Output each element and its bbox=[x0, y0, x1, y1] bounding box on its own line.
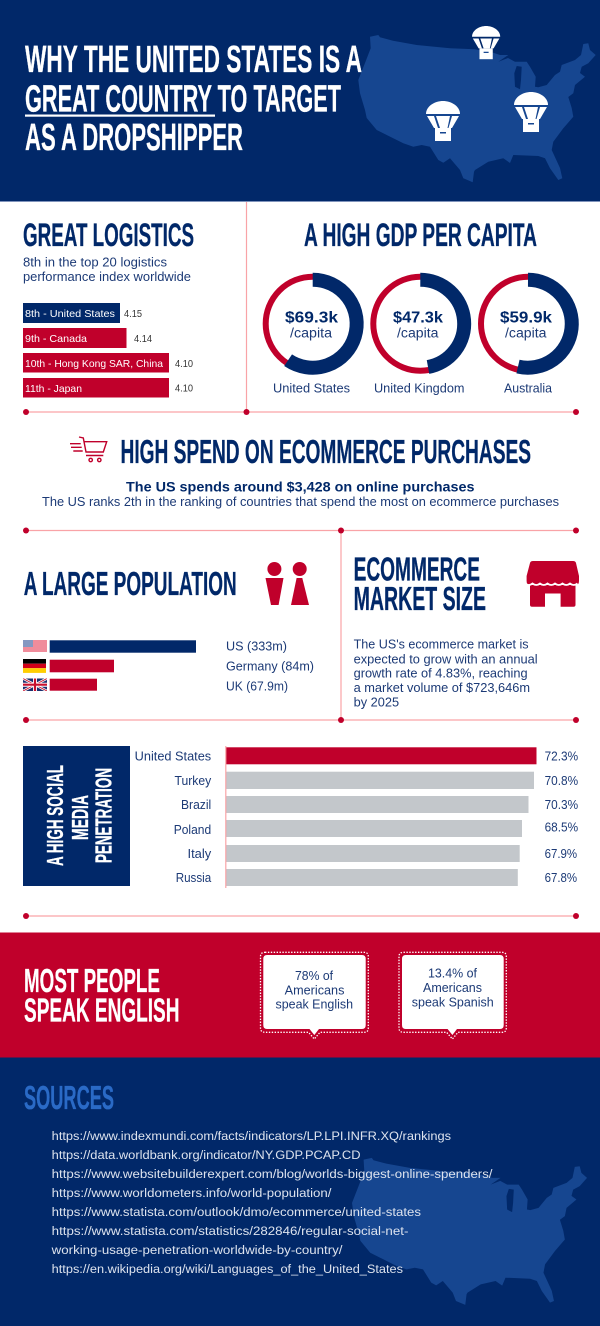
text: source links: https://www.statista.com/outlook/dmo/ecommerce/united-states bbox=[52, 1205, 421, 1219]
country labels: Italy bbox=[188, 847, 212, 861]
callout: 78% speak English: 78% of bbox=[295, 969, 334, 983]
bar chart: logistics index bbox=[23, 303, 193, 398]
icon: store bbox=[525, 561, 579, 607]
percentage labels: 70.3% bbox=[545, 798, 578, 812]
bar chart: logistics index: 4.10 bbox=[175, 382, 193, 394]
icon: people bbox=[266, 562, 309, 605]
header panel bbox=[0, 0, 600, 202]
heading box: social media: A HIGH SOCIAL bbox=[42, 765, 68, 866]
callout: 13.4% speak Spanish: 13.4% of bbox=[428, 967, 478, 981]
donut: United States: /capita bbox=[290, 326, 333, 340]
percentage labels: 68.5% bbox=[545, 821, 578, 835]
text: spend summary: The US spends around $3,428 on online purchases bbox=[126, 478, 475, 494]
bar chart: logistics index: 8th - United States bbox=[25, 308, 115, 320]
heading: english: MOST PEOPLE bbox=[24, 962, 160, 999]
text: market size description: expected to grow with an annual bbox=[354, 652, 538, 666]
callout: 78% speak English: speak English bbox=[276, 997, 353, 1011]
text: logistics description: 8th in the top 20 logistics bbox=[23, 256, 167, 270]
bar chart: logistics index: 4.14 bbox=[134, 333, 152, 345]
text: source links bbox=[51, 1129, 493, 1276]
bar chart: social penetration bbox=[226, 746, 537, 888]
callout: 13.4% speak Spanish: Americans bbox=[423, 981, 482, 995]
heading box: social media: MEDIA bbox=[67, 795, 93, 840]
bar chart: population bbox=[50, 640, 196, 691]
flag: United Kingdom bbox=[23, 678, 47, 691]
panel: a large population bbox=[23, 562, 314, 694]
text: spend summary bbox=[42, 478, 559, 509]
donut: Australia: Australia bbox=[504, 380, 553, 396]
map: United States watermark bbox=[352, 1158, 587, 1305]
country labels: Brazil bbox=[181, 798, 211, 812]
donut: Australia bbox=[481, 277, 575, 396]
percentage labels: 70.8% bbox=[545, 774, 578, 788]
map: United States bbox=[358, 35, 596, 182]
title: AS A DROPSHIPPER bbox=[25, 117, 243, 159]
heading: english bbox=[24, 962, 180, 1029]
panel: ecommerce market size bbox=[354, 551, 579, 709]
percentage labels bbox=[545, 750, 578, 885]
flag: Germany bbox=[23, 659, 46, 673]
bar chart: logistics index: 10th - Hong Kong SAR, China bbox=[25, 358, 163, 370]
heading: market size: MARKET SIZE bbox=[354, 580, 486, 617]
icon: shopping cart bbox=[70, 437, 107, 462]
population labels: Germany (84m) bbox=[226, 660, 314, 674]
country labels: Russia bbox=[176, 871, 211, 885]
donut: United Kingdom bbox=[373, 277, 467, 396]
text: source links: https://en.wikipedia.org/wiki/Languages_of_the_United_States bbox=[52, 1262, 403, 1276]
panel: great logistics bbox=[23, 217, 194, 398]
percentage labels: 67.9% bbox=[545, 847, 577, 861]
text: source links: working-usage-penetration-worldwide-by-country/ bbox=[51, 1243, 343, 1257]
donut: Australia: $59.9k bbox=[500, 310, 552, 327]
panel: high spend on ecommerce bbox=[42, 433, 559, 509]
donut: United States: United States bbox=[273, 380, 350, 396]
text: logistics description: performance index worldwide bbox=[23, 270, 191, 284]
text: market size description: by 2025 bbox=[354, 695, 399, 709]
text: source links: https://data.worldbank.org/indicator/NY.GDP.PCAP.CD bbox=[52, 1148, 361, 1162]
title: WHY THE UNITED STATES IS A bbox=[25, 39, 362, 81]
heading: sources: SOURCES bbox=[24, 1079, 114, 1116]
text: spend summary: The US ranks 2th in the ranking of countries that spend the most on ecommerce purchases bbox=[42, 495, 559, 509]
flag: United States bbox=[23, 640, 47, 653]
heading: great logistics: GREAT LOGISTICS bbox=[23, 217, 194, 253]
callout: 78% speak English bbox=[260, 952, 368, 1039]
country labels: Poland bbox=[174, 823, 211, 837]
percentage labels: 67.8% bbox=[545, 871, 577, 885]
callout: 13.4% speak Spanish: speak Spanish bbox=[412, 996, 494, 1010]
donut: United States bbox=[266, 277, 360, 396]
population labels bbox=[226, 640, 314, 694]
heading: market size bbox=[354, 551, 486, 617]
text: source links: https://www.indexmundi.com/facts/indicators/LP.LPI.INFR.XQ/rankings bbox=[52, 1129, 451, 1143]
heading box: social media bbox=[23, 746, 130, 886]
text: source links: https://www.websitebuilderexpert.com/blog/worlds-biggest-online-spenders/ bbox=[52, 1167, 493, 1181]
donut: United Kingdom: United Kingdom bbox=[374, 380, 464, 396]
title bbox=[25, 39, 362, 159]
text: market size description: The US's ecommerce market is bbox=[354, 638, 529, 652]
bar chart: logistics index: 11th - Japan bbox=[25, 383, 82, 395]
country labels: United States bbox=[135, 750, 211, 764]
heading box: social media: PENETRATION bbox=[91, 768, 117, 863]
title: GREAT COUNTRY TO TARGET bbox=[25, 78, 341, 120]
percentage labels: 72.3% bbox=[545, 750, 578, 764]
panel: high social media penetration bbox=[23, 746, 578, 888]
donut: United States: $69.3k bbox=[285, 310, 338, 327]
heading: market size: ECOMMERCE bbox=[354, 551, 480, 588]
donut: United Kingdom: /capita bbox=[397, 326, 439, 340]
bar chart: logistics index: 4.15 bbox=[124, 308, 142, 320]
population labels: UK (67.9m) bbox=[226, 680, 288, 694]
icon: parachute top bbox=[472, 26, 500, 59]
icon: parachute right bbox=[514, 92, 548, 132]
text: market size description: growth rate of 4.83%, reaching bbox=[354, 667, 528, 681]
text: market size description bbox=[354, 638, 538, 709]
panel: high gdp per capita bbox=[266, 217, 575, 396]
country labels bbox=[135, 750, 212, 885]
panel: most people speak english bbox=[0, 932, 600, 1058]
callout: 13.4% speak Spanish bbox=[399, 952, 506, 1039]
bar chart: logistics index: 4.10 bbox=[175, 358, 193, 370]
text: source links: https://www.statista.com/statistics/282846/regular-social-net- bbox=[52, 1224, 408, 1238]
bar chart: logistics index: 9th - Canada bbox=[25, 333, 87, 345]
text: source links: https://www.worldometers.info/world-population/ bbox=[52, 1186, 332, 1200]
heading: population: A LARGE POPULATION bbox=[24, 565, 237, 602]
donut: United Kingdom: $47.3k bbox=[393, 310, 443, 327]
callout: 78% speak English: Americans bbox=[285, 983, 344, 997]
donut: Australia: /capita bbox=[505, 326, 547, 340]
panel: sources bbox=[0, 1058, 600, 1326]
icon: parachute left bbox=[426, 101, 460, 141]
text: market size description: a market volume of $723,646m bbox=[354, 681, 530, 695]
country labels: Turkey bbox=[174, 774, 212, 788]
text: logistics description bbox=[23, 256, 191, 284]
population labels: US (333m) bbox=[226, 640, 287, 654]
heading: english: SPEAK ENGLISH bbox=[24, 992, 180, 1029]
